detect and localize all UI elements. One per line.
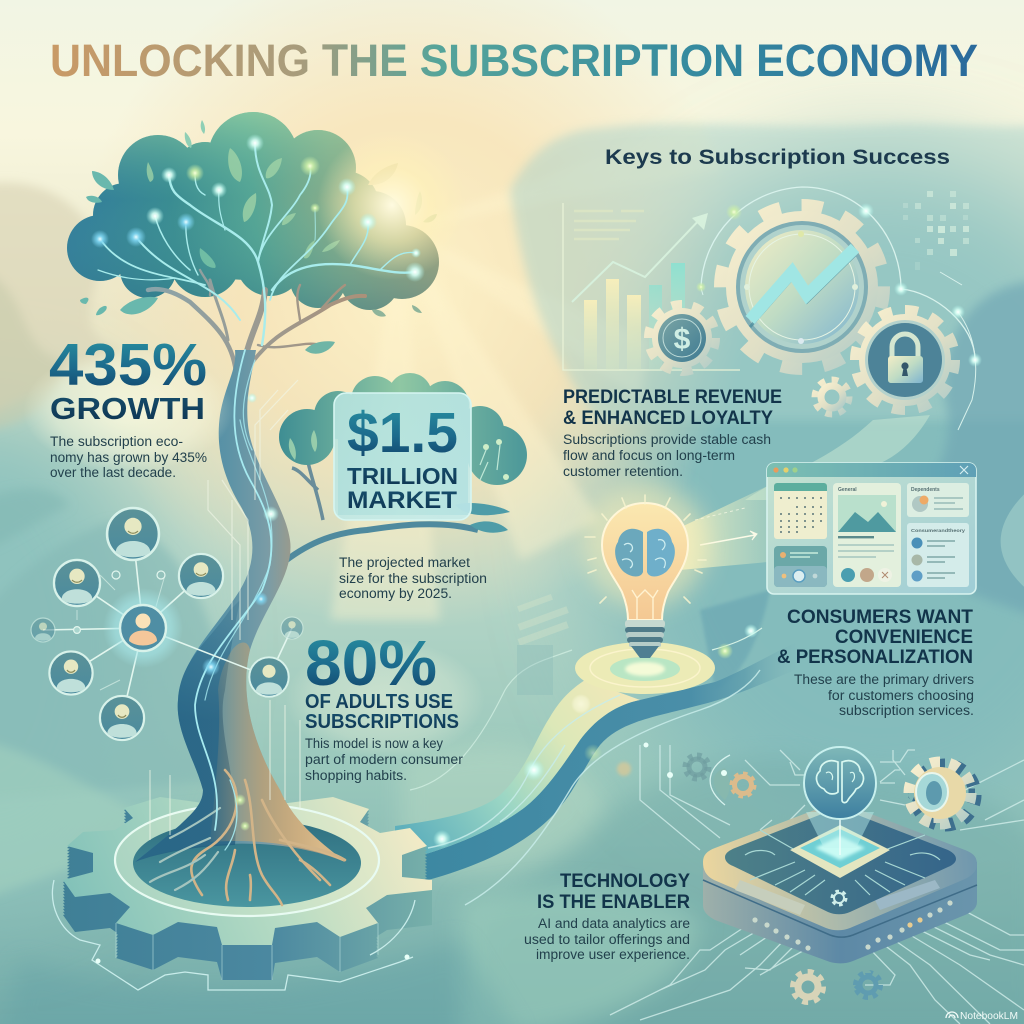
AI chip [703, 804, 977, 963]
right dark blob [880, 280, 1024, 620]
right bottom card [907, 523, 969, 587]
text: consumers [777, 607, 974, 718]
stat: market card: TRILLION [347, 463, 458, 489]
bulb pedestal [575, 642, 715, 694]
bulb rays [585, 495, 706, 603]
canopy leaves [147, 148, 340, 268]
chip ports [752, 900, 953, 951]
sun rays [330, 120, 720, 620]
orbit arcs and pixels [696, 187, 982, 430]
stat: 80 percent: SUBSCRIPTIONS [305, 711, 459, 733]
text: predictable revenue: Subscriptions provide stable cash [563, 432, 771, 447]
hologram beam [806, 812, 874, 848]
text: consumers: for customers choosing [828, 688, 974, 703]
middle card: General [838, 487, 857, 493]
calendar card [774, 483, 827, 539]
brain sphere [804, 747, 876, 819]
right top card [907, 483, 969, 517]
market description [339, 555, 487, 601]
stat: 435% growth: The subscription eco- [50, 434, 183, 449]
tree trunk with roots [135, 350, 345, 905]
tree canopy [60, 105, 450, 317]
right gear [910, 763, 975, 825]
falling leaves [80, 120, 437, 317]
text: technology: AI and data analytics are [538, 916, 690, 931]
circuit traces [610, 745, 1024, 1024]
small gears bottom [794, 973, 880, 1001]
market description: size for the subscription [339, 571, 487, 586]
stat: 80 percent: OF ADULTS USE [305, 691, 453, 713]
stat: 80 percent: part of modern consumer [305, 752, 464, 767]
glowing branches [98, 143, 416, 345]
stat: 80 percent: 80% [305, 627, 437, 699]
title: UNLOCKING THE SUBSCRIPTION ECONOMY [50, 35, 978, 86]
small leaf on branch [305, 341, 335, 354]
text: technology: IS THE ENABLER [537, 892, 690, 913]
text: consumers: subscription services. [839, 703, 974, 718]
trend arrow [750, 255, 855, 327]
text: predictable revenue: PREDICTABLE REVENUE [563, 387, 782, 408]
brain in bulb [615, 529, 643, 576]
stock chart [563, 203, 740, 370]
dark hill behind bulb [700, 590, 770, 690]
faint skyline [517, 594, 569, 695]
market description: The projected market [339, 555, 470, 570]
UI dashboard panel [767, 463, 976, 594]
orbit circuit lines [52, 880, 415, 990]
stat: 435% growth: GROWTH [50, 391, 205, 426]
stat: 80 percent [285, 627, 485, 783]
middle card [833, 483, 901, 587]
right panel hill [510, 124, 1024, 420]
stat: 435% growth: nomy has grown by 435% [50, 450, 207, 465]
stat: 435% growth: 435% [49, 332, 207, 398]
swoosh from gears to panel [745, 415, 930, 500]
gear: lock [856, 311, 954, 409]
gear: dollar: $ [674, 323, 691, 356]
stat: market card: $1.5 [347, 401, 458, 465]
sun core glow [300, 120, 480, 300]
stat: market card: MARKET [347, 487, 457, 514]
ribbon path [395, 624, 800, 905]
heading: keys to success: Keys to Subscription Success [605, 146, 950, 169]
text: technology [524, 871, 690, 962]
stat: 435% growth [23, 332, 233, 480]
stat: market card [334, 393, 471, 520]
lightbulb [583, 483, 707, 658]
small card [774, 546, 827, 587]
second tree behind market card [279, 373, 527, 565]
text: consumers: These are the primary drivers [794, 672, 974, 687]
circuit traces around trunk [150, 380, 300, 840]
stat: 80 percent: shopping habits. [305, 768, 407, 783]
technology floating icons [644, 742, 754, 805]
text: consumers: CONSUMERS WANT [787, 607, 973, 628]
text: predictable revenue: customer retention. [563, 464, 683, 479]
text: consumers: CONVENIENCE [835, 627, 973, 648]
stat: 80 percent: This model is now a key [305, 736, 443, 751]
watermark: NotebookLM [960, 1010, 1018, 1022]
text: predictable revenue: flow and focus on long-term [563, 448, 735, 463]
bulb base [625, 620, 665, 658]
tiny gear [815, 380, 849, 414]
gear: trend [721, 206, 883, 368]
user nodes [107, 508, 159, 560]
gear pit [133, 819, 361, 907]
hub user [120, 605, 166, 651]
right bottom card: Consumerandtheory [911, 528, 966, 533]
text: predictable revenue: & ENHANCED LOYALTY [563, 408, 773, 429]
right top card: Dependents [911, 487, 940, 493]
hills left [0, 183, 230, 900]
gear: dollar [649, 305, 715, 371]
glowing branch nodes [91, 134, 425, 282]
light beam to panel [675, 480, 790, 570]
mid hills lower [400, 745, 605, 875]
chip traces [745, 830, 940, 895]
gear base [52, 797, 432, 990]
text: predictable revenue [563, 387, 782, 479]
text: consumers: & PERSONALIZATION [777, 647, 973, 668]
gear ring [115, 804, 379, 916]
text: technology: improve user experience. [536, 947, 690, 962]
branches [98, 143, 416, 372]
people network [31, 508, 303, 740]
stat: 435% growth: over the last decade. [50, 465, 176, 480]
central die [790, 825, 890, 878]
text: technology: TECHNOLOGY [560, 871, 690, 892]
text: technology: used to tailor offerings and [524, 932, 690, 947]
trunk glowing veins [195, 350, 272, 850]
smiles [67, 531, 206, 717]
market description: economy by 2025. [339, 586, 452, 601]
